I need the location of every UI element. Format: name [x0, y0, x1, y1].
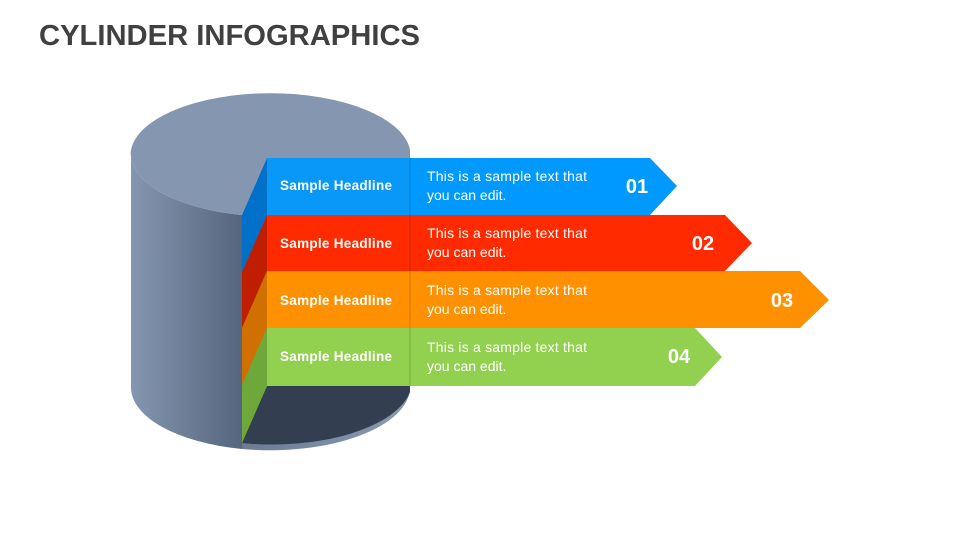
band 1 — [267, 158, 677, 215]
band 3 — [267, 271, 829, 328]
band 1: This is a sample text that — [427, 168, 587, 184]
band 2: you can edit. — [427, 244, 506, 260]
title: CYLINDER INFOGRAPHICS — [39, 20, 420, 52]
band 2 — [267, 215, 752, 271]
band 3: you can edit. — [427, 301, 506, 317]
band 4: This is a sample text that — [427, 339, 587, 355]
cylinder — [131, 93, 410, 450]
cylinder top — [131, 93, 410, 215]
side faces — [242, 158, 267, 443]
band 4: Sample Headline — [280, 349, 392, 364]
band 1: you can edit. — [427, 187, 506, 203]
band 2: This is a sample text that — [427, 225, 587, 241]
band 3: Sample Headline — [280, 293, 392, 308]
band 2: Sample Headline — [280, 236, 392, 251]
band 2: 02 — [692, 233, 714, 255]
band 1: Sample Headline — [280, 178, 392, 193]
band 3: 03 — [771, 290, 793, 312]
band 4 — [267, 328, 722, 386]
band 1: 01 — [626, 176, 648, 198]
band 4: you can edit. — [427, 358, 506, 374]
band 3: This is a sample text that — [427, 282, 587, 298]
cylinder cut bottom face — [242, 386, 410, 444]
band 4: 04 — [668, 346, 691, 368]
